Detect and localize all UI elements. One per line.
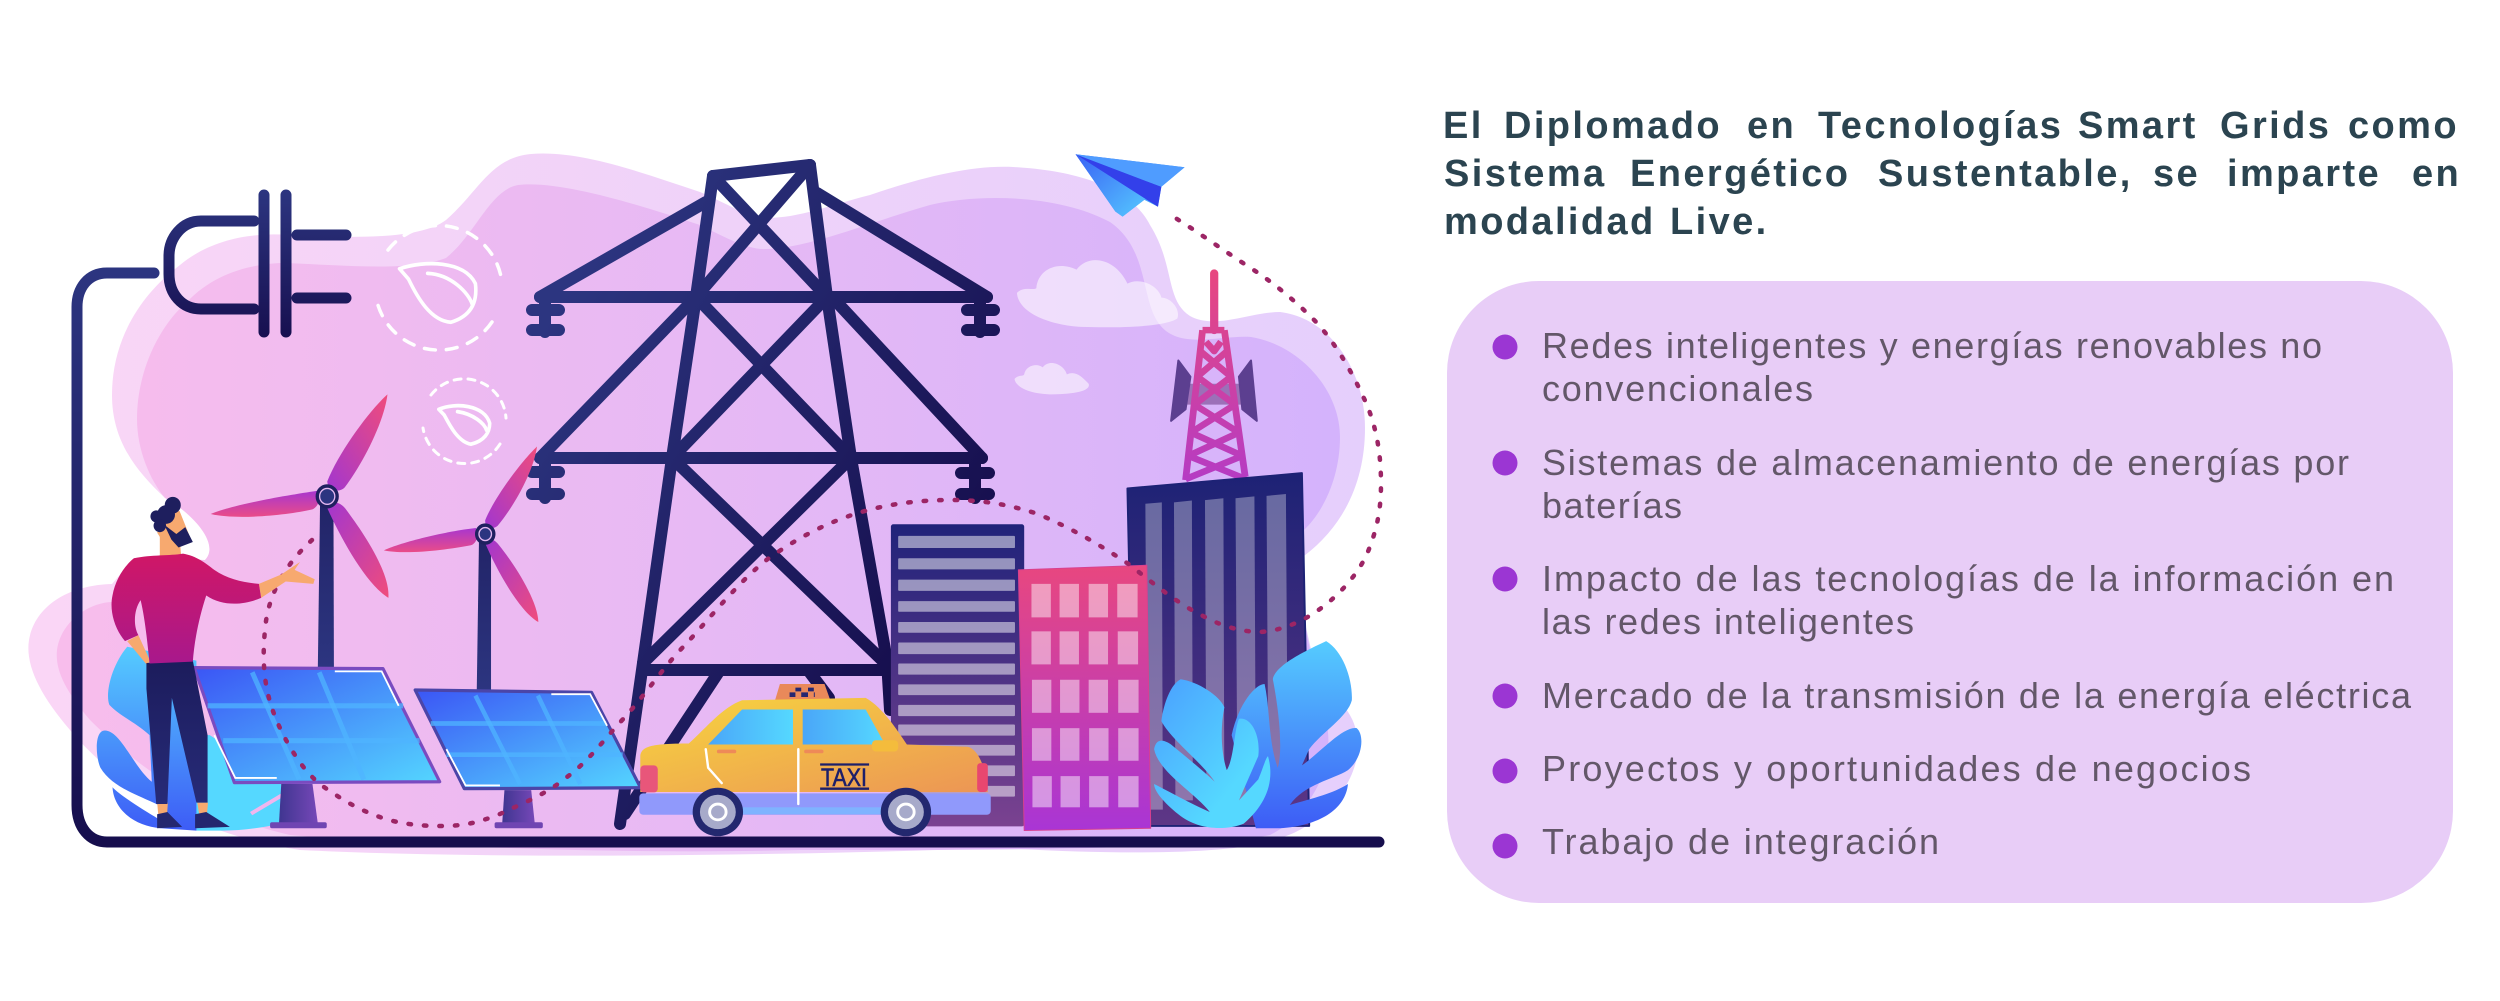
heading: en (2412, 153, 2461, 195)
heading: como (2348, 105, 2459, 147)
background blob: inner (57, 184, 1340, 851)
list item: electricity market: Mercado de la transmisión de la energía eléctrica (1542, 675, 2412, 716)
building: pink block (1018, 565, 1151, 831)
heading: Tecnologías (1818, 105, 2063, 147)
heading: Diplomado (1504, 105, 1722, 147)
heading: Smart (2078, 105, 2198, 147)
clouds (1014, 260, 1178, 394)
icon: taxi (639, 684, 991, 836)
heading: Live. (1670, 201, 1769, 243)
panel: course topics (1447, 281, 2453, 903)
icon: dashed leaf circles (376, 226, 506, 464)
background blob: outer (28, 154, 1365, 856)
list item: information technology: las redes inteligentes (1542, 601, 1914, 642)
icon: radio tower (1171, 273, 1257, 480)
icon: plug (169, 195, 346, 332)
heading: Energético (1630, 153, 1850, 195)
list item: business projects: Proyectos y oportunidades de negocios (1542, 748, 2251, 789)
list item: final project: Trabajo de integración (1542, 821, 1939, 862)
list item: renewable energy: Redes inteligentes y energías renovables no (1542, 325, 2322, 366)
building: dark skyscraper (1127, 473, 1309, 826)
list item: battery storage: Sistemas de almacenamiento de energías por (1542, 442, 2349, 483)
buildings (891, 473, 1309, 831)
icon: paper plane (1076, 154, 1185, 217)
icon: left plant (97, 647, 281, 831)
heading: Sustentable, (1878, 153, 2133, 195)
list item: renewable energy (1492, 325, 2322, 409)
power cord (77, 273, 1379, 842)
building: striped block (891, 524, 1024, 826)
dotted connection path (264, 214, 1381, 826)
list item: renewable energy: convencionales (1542, 368, 1813, 409)
heading: El (1443, 105, 1484, 147)
icon: wind turbines (211, 394, 538, 691)
list item: information technology: Impacto de las tecnologías de la información en (1542, 558, 2394, 599)
list item: information technology (1492, 558, 2394, 642)
icon: taxi: TAXI (821, 764, 867, 792)
heading: se (2153, 153, 2200, 195)
icon: right plants (1154, 641, 1361, 828)
heading: Sistema (1444, 153, 1607, 195)
icon: transmission tower (532, 165, 994, 824)
heading: Grids (2220, 105, 2331, 147)
heading: modalidad (1444, 201, 1656, 243)
solar panel: small (415, 690, 641, 828)
list item: battery storage: baterías (1542, 485, 1682, 526)
person (112, 497, 315, 828)
list item: battery storage (1492, 442, 2349, 526)
icon: solar panels (194, 668, 641, 828)
heading: imparte (2227, 153, 2381, 195)
heading: en (1747, 105, 1796, 147)
solar panel: large (194, 668, 440, 828)
